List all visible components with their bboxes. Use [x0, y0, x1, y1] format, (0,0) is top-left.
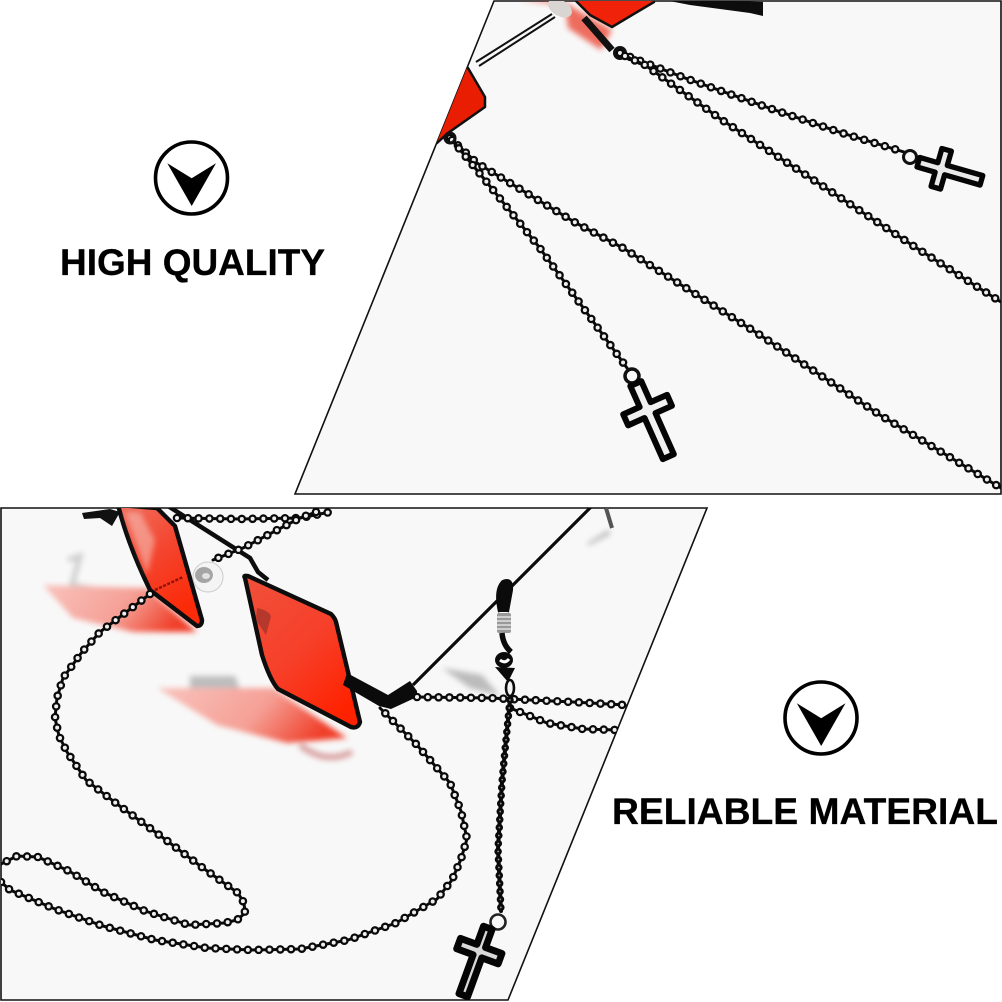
- chain: bottom long strand: [1, 708, 467, 950]
- chain: horizontal strand one: [417, 697, 625, 705]
- cross pendant: lower: [620, 367, 677, 462]
- shadow: ear tip: [586, 530, 611, 545]
- chain: horizontal strand two: [510, 708, 617, 730]
- icon: down arrow in circle (reliable material): [785, 682, 857, 754]
- top glasses: wire temple: [476, 14, 555, 66]
- top glasses: clasp: [584, 18, 626, 58]
- top glasses: red lens shadow: [520, 0, 612, 50]
- glasses: left lens: [118, 505, 202, 626]
- chain: second upper strand: [625, 56, 1001, 302]
- glasses: right lens: [244, 576, 360, 727]
- chain: long left loop: [1, 594, 245, 925]
- glasses: bridge hinge: [343, 673, 417, 709]
- chain: vertical strand to cross: [498, 700, 510, 911]
- cross pendant: bottom: [453, 913, 507, 1000]
- top glasses: right lens: [572, 0, 654, 27]
- chain: long lower strand: [450, 138, 1001, 488]
- top glasses: nose pad: [548, 1, 572, 18]
- heading: reliable material: RELIABLE MATERIAL: [612, 791, 998, 832]
- glasses: ear tip: [606, 508, 612, 528]
- chain: top strand: [177, 512, 330, 519]
- panel: bottom product photo: [1, 505, 707, 1002]
- glasses: long temple wire: [413, 506, 592, 685]
- panel: top product photo: [295, 0, 1001, 494]
- heading: high quality: HIGH QUALITY: [60, 242, 325, 283]
- glasses: nose pad: [193, 562, 223, 592]
- cross pendant: upper right: [902, 146, 986, 192]
- shadow: left lens: [43, 556, 197, 632]
- glasses: far arm stub: [82, 509, 120, 526]
- top glasses: left lens: [436, 66, 486, 144]
- chain: upper to cross: [620, 53, 904, 152]
- ear loop with coil and clasp: [495, 581, 515, 696]
- top glasses: black temple tip: [672, 2, 763, 16]
- chain: crossing strand: [213, 512, 316, 560]
- shadow: right lens: [157, 676, 352, 757]
- shadow: temple: [442, 668, 500, 696]
- glasses: upper temple bar: [168, 506, 268, 580]
- ring on left lens: [445, 133, 455, 143]
- chain: lower to cross: [452, 140, 627, 368]
- icon: down arrow in circle (high quality): [156, 142, 228, 214]
